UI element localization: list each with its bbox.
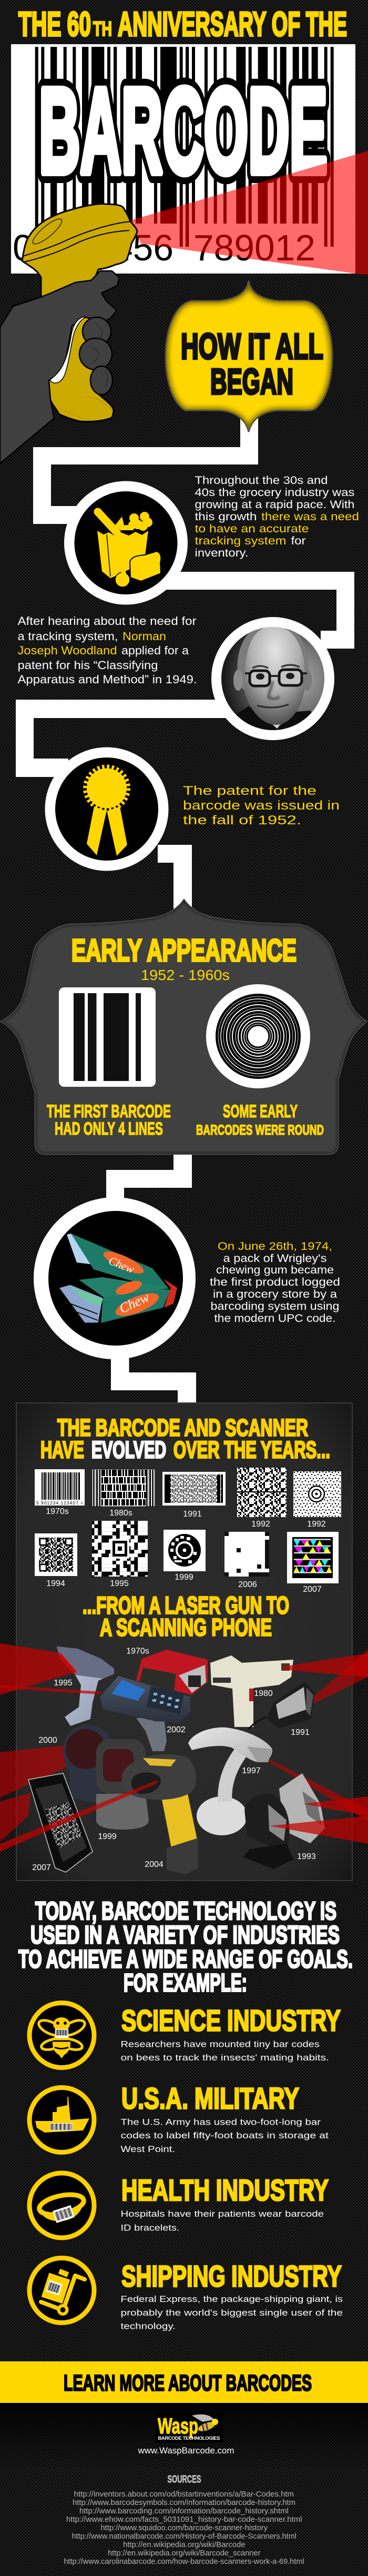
hand: [0, 271, 119, 463]
scanner 2004 yellow gun: 2004: [145, 1860, 163, 1869]
barcode digits: 123456: [52, 227, 173, 268]
icon: chewing gum: [34, 1197, 196, 1359]
text block: woodland: [18, 614, 197, 686]
scanner 2002 handheld: 2002: [167, 1725, 186, 1734]
text block: grocery: for: [291, 535, 306, 547]
hand holding scanner: [0, 204, 137, 463]
scanner 2004 yellow gun: [122, 1754, 198, 1874]
text block: first UPC scan: a pack of Wrigley's: [223, 1252, 327, 1265]
source links: http://en.wikipedia.org/wiki/Barcode: [123, 2540, 245, 2549]
heading: from a laser gun: A SCANNING PHONE: [100, 1614, 272, 1641]
text block: grocery: inventory.: [195, 547, 248, 559]
text block: science: on bees to track the insects' mating habits.: [121, 2053, 329, 2063]
scanner 1997 stand: [188, 1728, 272, 1835]
caption: first barcode: THE FIRST BARCODE: [47, 1102, 171, 1122]
banner: learn more: [0, 2361, 368, 2403]
barcode sample 1992: [237, 1468, 287, 1529]
panel: evolution: [16, 1403, 352, 1881]
scanner 1993 pair: [243, 1773, 325, 1869]
scanner 2000 orbit: 2000: [38, 1736, 57, 1745]
icon: round barcode: [206, 984, 310, 1088]
text block: shipping: technology.: [121, 2321, 176, 2331]
text block: first UPC scan: [210, 1240, 340, 1325]
heading: from a laser gun: [83, 1592, 289, 1641]
barcode sample 1991: [162, 1472, 226, 1519]
text block: health: [121, 2209, 324, 2232]
text block: woodland: Norman: [122, 630, 166, 643]
text block: first UPC scan: chewing gum became: [216, 1264, 334, 1276]
text block: patent: The patent for the: [183, 784, 316, 798]
banner heading: BEGAN: [210, 361, 293, 402]
text block: grocery: tracking system: [195, 535, 286, 547]
text block: shipping: [121, 2294, 343, 2331]
barcode sample 1980s: 1980s: [109, 1509, 132, 1518]
heading: evolved over the years: EVOLVED: [91, 1436, 166, 1463]
text block: shipping: probably the world's biggest single user of the: [121, 2308, 343, 2318]
caption: first barcode: HAD ONLY 4 LINES: [55, 1119, 163, 1139]
text block: first UPC scan: the first product logged: [210, 1276, 340, 1288]
barcode sample 1992: 1992: [251, 1520, 270, 1529]
scanner 1980 beige gun: [210, 1655, 293, 1727]
text block: woodland: Joseph Woodland: [18, 644, 117, 657]
text block: first UPC scan: On June 26th, 1974,: [218, 1240, 332, 1252]
gum pack bottom: [59, 1285, 170, 1323]
gum pack top: [67, 1234, 169, 1289]
white connector path 3: [106, 1152, 192, 1202]
text block: grocery: growing at a rapid pace. With: [195, 499, 354, 511]
logo bee: [192, 2415, 218, 2433]
scanner 1970s red box: 1970s: [126, 1646, 149, 1656]
source links: http://en.wikipedia.org/wiki/Barcode_scanner: [108, 2549, 261, 2558]
barcode sample 1970s: 1970s: [46, 1507, 69, 1516]
panel: early appearance: [1, 900, 366, 1154]
barcode digits: [13, 227, 315, 268]
heading: evolved over the years: [40, 1414, 330, 1463]
heading: evolved over the years: HAVE: [40, 1436, 84, 1463]
source links: http://www.ehow.com/facts_5031091_history-bar-code-scanner.html: [66, 2515, 302, 2524]
icon: four line barcode: [59, 987, 156, 1087]
source links: http://www.squidoo.com/barcode-scanner-history: [101, 2523, 268, 2532]
text block: woodland: Apparatus and Method” in 1949.: [18, 673, 197, 686]
scanner 1995 gun: [54, 1646, 114, 1726]
text block: woodland: a tracking system,: [18, 630, 118, 643]
source links: http://www.barcoding.com/information/barcode_history.shtml: [79, 2507, 289, 2516]
text block: science: Researchers have mounted tiny bar codes: [121, 2039, 320, 2049]
laser beams behind devices: [0, 1650, 368, 1842]
barcode digits: 0: [13, 227, 33, 268]
text block: health: ID bracelets.: [121, 2223, 180, 2232]
title: TH: [93, 18, 112, 41]
text block: grocery: this growth: [195, 511, 257, 523]
text block: patent: the fall of 1952.: [183, 813, 301, 827]
text block: patent: barcode was issued in: [183, 799, 340, 813]
logo: wasp: Wasp: [158, 2413, 198, 2438]
gum pack middle: [79, 1277, 177, 1308]
barcode bars: [35, 47, 334, 247]
banner heading: [181, 326, 323, 402]
laser beam: [130, 151, 368, 275]
text block: health: Hospitals have their patients wear barcode: [121, 2209, 324, 2219]
scanner 2007 phone: 2007: [32, 1863, 51, 1872]
text block: first UPC scan: in a grocery store by a: [213, 1288, 337, 1300]
scanner 1995 gun: 1995: [54, 1679, 73, 1688]
icon: hand truck: [29, 2258, 94, 2323]
heading: today: FOR EXAMPLE:: [124, 1969, 247, 1997]
text block: science: [121, 2039, 329, 2063]
gum pack bottom: Chew: [117, 1289, 152, 1316]
white connector path 4: [111, 1355, 196, 1405]
text block: grocery: 40s the grocery industry was: [195, 487, 354, 499]
barcode sample 1970s: [35, 1469, 85, 1516]
text block: grocery: [195, 474, 359, 559]
barcode sample 1991: 1991: [183, 1510, 202, 1519]
scanner 1991 cube: 1991: [291, 1728, 310, 1737]
title: THE 60: [18, 5, 91, 43]
icon: award ribbon: [45, 747, 168, 871]
icon: ship: [29, 2087, 94, 2153]
barcode sample 1995: 1995: [110, 1579, 129, 1588]
text block: woodland: After hearing about the need for: [18, 614, 196, 628]
barcode sample 1970s: 5 901234 123457 >: [36, 1500, 83, 1506]
barcode sample 2007 colour: [287, 1532, 339, 1594]
barcode sample 1994: 1994: [46, 1579, 65, 1588]
text block: grocery: to have an accurate: [195, 523, 309, 535]
heading: military: U.S.A. MILITARY: [121, 2082, 299, 2116]
source links: [64, 2490, 304, 2566]
barcode sample 2006: 2006: [238, 1580, 257, 1589]
footer shade: [0, 2403, 368, 2469]
icon: bee: [29, 2003, 94, 2067]
text block: woodland: applied for a: [121, 644, 189, 657]
logo: wasp: BARCODE TECHNOLOGIES: [158, 2436, 220, 2441]
scanner 1997 stand: 1997: [242, 1766, 261, 1775]
portrait: norman woodland: [211, 617, 334, 740]
text block: military: [121, 2117, 329, 2154]
scanner 2002 handheld: [100, 1676, 190, 1751]
heading: sources: SOURCES: [167, 2473, 201, 2485]
laser beams over devices: [0, 1643, 368, 1852]
barcode sample 1980s: [92, 1469, 155, 1518]
website url: www.WaspBarcode.com: [138, 2446, 234, 2456]
scanner: [22, 204, 137, 421]
scanner 1999 presentation: 1999: [98, 1832, 117, 1841]
text block: first UPC scan: barcoding system using: [210, 1300, 340, 1312]
icon: bracelet: [29, 2173, 94, 2238]
icon: grocery bag: [64, 481, 188, 605]
barcode sample 1995: [92, 1521, 148, 1588]
scanner 2007 phone: [28, 1773, 93, 1872]
text block: woodland: patent for his “Classifying: [18, 659, 158, 672]
barcode sample 1999: [163, 1530, 206, 1582]
title: [18, 5, 347, 43]
barcode sample 1992 bullseye: [293, 1471, 341, 1529]
source links: http://inventors.about.com/od/bstartinventions/a/Bar-Codes.htm: [74, 2490, 294, 2499]
heading: today: [18, 1897, 353, 1997]
scanner 1999 presentation: [96, 1739, 149, 1841]
barcode sample 1992 bullseye: 1992: [307, 1520, 326, 1529]
caption: round barcodes: [196, 1102, 324, 1138]
barcode sample 2006: [224, 1532, 269, 1589]
portrait jacket: [237, 706, 311, 730]
text block: first UPC scan: the modern UPC code.: [214, 1312, 335, 1325]
text block: military: codes to label fifty-foot boats in storage at: [121, 2130, 329, 2140]
caption: round barcodes: SOME EARLY: [223, 1102, 298, 1122]
caption: first barcode: [47, 1102, 171, 1139]
barcode sample 2007 colour: 2007: [303, 1585, 322, 1594]
text block: military: West Point.: [121, 2144, 175, 2154]
scanner 1970s red box: [126, 1646, 208, 1695]
text block: patent: [183, 784, 340, 827]
source links: http://www.carolinabarcode.com/how-barcode-scanners-work-a-69.html: [64, 2557, 304, 2566]
white connector path 1: [33, 410, 354, 649]
source links: http://www.nationalbarcode.com/History-of-Barcode-Scanners.html: [72, 2532, 297, 2541]
gum pack top: Chew: [107, 1254, 136, 1276]
barcode sample 1994: [35, 1533, 77, 1588]
logo: wasp: [156, 2412, 223, 2442]
barcode sample 1999: 1999: [175, 1573, 193, 1582]
source links: http://www.barcodesymbols.com/information/barcode-history.htm: [73, 2498, 295, 2507]
scanner 2000 orbit: [38, 1724, 113, 1804]
scanner 1991 cube: [249, 1682, 314, 1737]
text block: shipping: Federal Express, the package-shipping giant, is: [121, 2294, 343, 2304]
barcode hero card: [11, 44, 355, 274]
fingers: [79, 317, 113, 395]
grip gap: [50, 317, 84, 383]
date range: 1952 - 1960s: [141, 967, 230, 983]
scanner 1993 pair: 1993: [297, 1852, 316, 1861]
text block: military: The U.S. Army has used two-foot-long bar: [121, 2117, 321, 2127]
scanner 1980 beige gun: 1980: [254, 1689, 273, 1698]
text block: grocery: Throughout the 30s and: [195, 474, 328, 487]
white connector path 2: [16, 700, 231, 910]
banner: how it all began: [166, 281, 332, 432]
barcode digits: 789012: [193, 227, 315, 268]
text block: grocery: there was a need: [261, 511, 359, 523]
